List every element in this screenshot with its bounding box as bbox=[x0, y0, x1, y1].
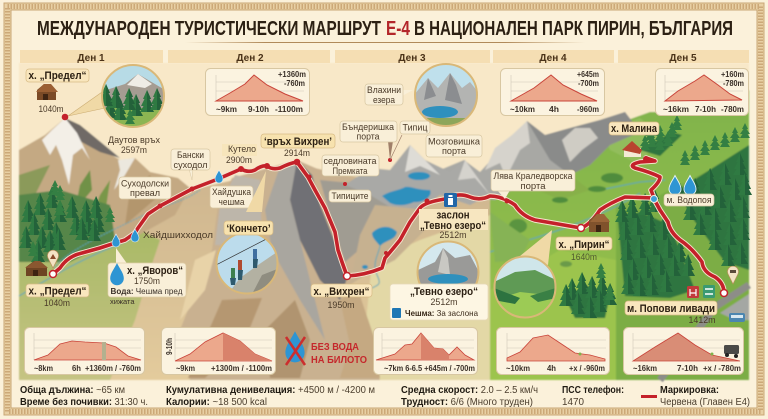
elevation card: day 1: ~8km bbox=[34, 364, 53, 373]
label: х. Пирин bbox=[556, 237, 612, 262]
label: седловината Премката bbox=[322, 155, 379, 176]
elevation card: day 5 bbox=[624, 328, 744, 374]
label: седловината Премката: Премката bbox=[332, 166, 368, 176]
column headers: Ден 2 bbox=[236, 53, 264, 64]
icons: water drops bbox=[112, 170, 696, 247]
label: седловината Премката: седловината bbox=[324, 156, 376, 166]
stats: rescue phone: 1470 bbox=[562, 397, 584, 408]
stats: length and time: Време без почивки: 31:30 ч. bbox=[20, 396, 148, 408]
title bbox=[37, 18, 733, 43]
red route bbox=[53, 158, 724, 293]
label: Даутов връх: Даутов връх bbox=[108, 135, 160, 145]
icon: hut Predel bbox=[25, 261, 48, 276]
label: заслон Тевно езеро bbox=[419, 209, 488, 240]
label: Предел top: х. „Предел“ bbox=[28, 70, 86, 82]
profile card: day 2: ~9km bbox=[216, 105, 237, 114]
label: х. Пирин: х. „Пирин“ bbox=[558, 239, 610, 251]
inset: Кончето via ferrata: ‘Кончето’ bbox=[226, 223, 270, 235]
icon: info sign bbox=[444, 193, 457, 207]
callout: Тевно езеро bbox=[390, 284, 488, 320]
legend: trail marking bbox=[641, 385, 750, 408]
elevation card: day 5: 7-10h bbox=[677, 364, 698, 373]
label: Кутело: 2900m bbox=[226, 155, 252, 165]
elevation card: day 5: ~16km bbox=[633, 364, 657, 373]
label: Мозговишка порта: порта bbox=[442, 146, 466, 156]
elevation card: day 2: 9-10h bbox=[165, 338, 174, 355]
column headers: Ден 1 bbox=[77, 53, 105, 64]
inset: forest peak bbox=[68, 62, 166, 132]
profile card: day 5: -780m bbox=[721, 105, 744, 114]
label: х. Малина: х. Малина bbox=[611, 123, 658, 135]
label: Бански суходол: Бански bbox=[177, 150, 204, 160]
column headers: Ден 4 bbox=[539, 53, 567, 64]
icon: hut Пирин bbox=[589, 214, 610, 232]
label: Хайдушка чешма: чешма bbox=[218, 197, 244, 207]
stats: speed and difficulty bbox=[401, 385, 538, 408]
stats: speed and difficulty: Трудност: 6/6 (Много труден) bbox=[401, 397, 533, 408]
map background bbox=[19, 63, 749, 380]
profile card: day 4: ~10km bbox=[510, 105, 535, 114]
label: х. Пирин: 1640m bbox=[571, 252, 597, 262]
profile card: day 5: +160m bbox=[721, 70, 744, 79]
terrain: lower left meadow bbox=[19, 215, 160, 380]
title: МЕЖДУНАРОДЕН ТУРИСТИЧЕСКИ МАРШРУТ bbox=[37, 18, 381, 40]
road bbox=[660, 285, 749, 380]
icons: parking and bed bbox=[687, 285, 715, 298]
profile card: day 4: -700m bbox=[578, 79, 599, 88]
terrain: green hill bbox=[490, 90, 749, 380]
profile card: day 2: 9-10h bbox=[248, 105, 269, 114]
label: Даутов връх bbox=[108, 135, 160, 155]
callout: Тевно езеро: 2512m bbox=[430, 297, 458, 307]
elevation card: day 1: 6h bbox=[72, 364, 81, 373]
label: Суходолски превал: Суходолски bbox=[121, 178, 169, 188]
stats: elevation and calories bbox=[166, 385, 375, 408]
stats: rescue phone: ПСС телефон: bbox=[562, 384, 624, 396]
icon: house Малина bbox=[622, 141, 642, 157]
elevation card: day 2: +1300m / -1100m bbox=[211, 364, 272, 373]
small bushes bbox=[509, 173, 623, 267]
profile card: day 4 bbox=[500, 68, 604, 116]
profile card: day 2: -1100m bbox=[275, 105, 303, 114]
label: Лява Краледворска порта bbox=[491, 170, 575, 199]
column headers bbox=[20, 50, 749, 64]
label: Хайдушка чешма bbox=[210, 186, 253, 208]
elevation card: day 4: ~10km bbox=[506, 364, 530, 373]
forest: day 5 upper right bbox=[640, 115, 752, 266]
elevation card: day 4: +x / -960m bbox=[569, 364, 605, 373]
elevation card: day 2: ~9km bbox=[176, 364, 195, 373]
label: х. Вихрен: х. „Вихрен“ bbox=[314, 286, 370, 298]
central Vihren massif bbox=[180, 160, 395, 380]
range behind lakes bbox=[345, 145, 490, 210]
label: х. Вихрен bbox=[311, 284, 372, 310]
elevation card: day 4 bbox=[496, 328, 610, 374]
callout: Яворов: 1750m bbox=[134, 276, 160, 286]
forest floor: left bbox=[19, 190, 115, 262]
label: м. Водопоя: м. Водопоя bbox=[666, 195, 712, 205]
label: заслон Тевно езеро: заслон bbox=[436, 210, 470, 222]
grey range bbox=[400, 112, 640, 200]
label: Предел bottom: х. „Предел“ bbox=[28, 286, 86, 298]
label: Лява Краледворска порта: порта bbox=[520, 181, 546, 191]
lakes bbox=[362, 172, 431, 269]
no water warning: БЕЗ ВОДА bbox=[311, 341, 359, 353]
stats: elevation and calories: Калории: ~18 500 kcal bbox=[166, 397, 267, 408]
label: Влахини езера bbox=[365, 84, 413, 105]
callout: Яворов: Вода: Чешма пред bbox=[110, 287, 183, 296]
elevation card: day 2 bbox=[162, 328, 276, 374]
inset: lake peaks bbox=[414, 62, 478, 128]
label: Типиц: Типиц bbox=[402, 122, 428, 132]
stats: elevation and calories: Кумулативна денивелация: +4500 м / -4200 м bbox=[166, 385, 375, 396]
label: Хайдушка чешма: Хайдушка bbox=[212, 187, 251, 197]
label: Вихрен summit bbox=[261, 134, 335, 158]
label: Вихрен summit: ‘връх Вихрен’ bbox=[264, 136, 332, 148]
profile card: day 5: 7-10h bbox=[695, 105, 716, 114]
icon: map pin bbox=[48, 250, 58, 268]
column headers: Ден 5 bbox=[669, 53, 697, 64]
profile card: day 5: ~16km bbox=[663, 105, 689, 114]
profile card: day 5 bbox=[656, 68, 748, 116]
terrain: lower cream-green valley bbox=[360, 215, 490, 380]
label: х. Вихрен: 1950m bbox=[328, 300, 354, 310]
elevation card: day 3 bbox=[374, 328, 478, 374]
profile card: day 4: 4h bbox=[549, 105, 559, 114]
forest: day 4 bbox=[559, 263, 617, 318]
no water warning: НА БИЛОТО bbox=[311, 354, 367, 366]
streams bbox=[19, 180, 665, 296]
elevation card: day 3: ~7km 6-6.5 +645m / -700m bbox=[384, 364, 475, 373]
label: Типиц bbox=[390, 121, 430, 160]
icon: hut top bbox=[36, 84, 58, 100]
label: Бъндеришка порта bbox=[340, 121, 397, 160]
callout: Яворов bbox=[108, 248, 186, 306]
label: Лява Краледворска порта: Лява Краледворска bbox=[494, 171, 572, 181]
stats: rescue phone bbox=[562, 384, 624, 408]
label: м. Попови ливади: 1412m bbox=[688, 315, 716, 325]
inset: green valley bbox=[494, 230, 556, 320]
label: Типиците: Типиците bbox=[332, 191, 368, 201]
left mountain bbox=[19, 118, 190, 240]
altitude 1040m top: 1040m bbox=[38, 104, 64, 114]
label: Бански суходол: суходол bbox=[174, 160, 208, 170]
callout: Яворов: х. „Яворов“ bbox=[127, 265, 183, 277]
label: Бански суходол bbox=[171, 149, 210, 180]
callout: Тевно езеро: „Тевно езеро“ bbox=[410, 286, 478, 298]
label: Бъндеришка порта: Бъндеришка bbox=[342, 122, 394, 132]
label: заслон Тевно езеро: 2512m bbox=[440, 230, 466, 240]
legend: trail marking: Червена (Главен Е4) bbox=[660, 397, 750, 408]
label: Хайдушки ход: Хайдшихходол bbox=[143, 230, 213, 240]
elevation card: day 4: 4h bbox=[547, 364, 556, 373]
label: Суходолски превал bbox=[119, 177, 171, 199]
stats: length and time: Обща дължина: ~65 км bbox=[20, 384, 125, 396]
profile card: day 2: -760m bbox=[284, 79, 305, 88]
label: Бъндеришка порта: порта bbox=[356, 132, 380, 142]
label: Влахини езера: Влахини bbox=[367, 85, 401, 95]
icon: car pin bbox=[728, 266, 739, 284]
label: Кутело bbox=[222, 144, 257, 165]
label: Кутело: Кутело bbox=[228, 144, 256, 154]
label: Суходолски превал: превал bbox=[130, 188, 160, 198]
elevation card: day 5: +x / -780m bbox=[703, 364, 741, 373]
callout: Яворов: хижата bbox=[110, 297, 135, 306]
label: Даутов връх: 2597m bbox=[121, 145, 147, 155]
label: м. Попови ливади bbox=[625, 301, 717, 325]
inset: Кончето via ferrata bbox=[216, 171, 280, 298]
label: Мозговишка порта bbox=[426, 135, 482, 157]
no water warning bbox=[285, 331, 367, 366]
legend: trail marking: Маркировка: bbox=[660, 385, 719, 396]
terrain: tan foothills bbox=[19, 165, 490, 380]
column headers: Ден 3 bbox=[398, 53, 426, 64]
inset: Тевно езеро bbox=[416, 240, 480, 284]
stats: speed and difficulty: Средна скорост: 2.0 – 2.5 км/ч bbox=[401, 385, 538, 396]
label: Предел bottom: 1040m bbox=[44, 298, 70, 308]
elevation card: day 1 bbox=[24, 328, 144, 374]
profile card: day 5: -780m bbox=[723, 79, 744, 88]
label: м. Попови ливади: м. Попови ливади bbox=[627, 303, 715, 315]
title: E-4 bbox=[386, 18, 411, 40]
profile card: day 4: +645m bbox=[577, 70, 599, 79]
elevation card: day 1: +1360m / -760m bbox=[85, 364, 141, 373]
label: Мозговишка порта: Мозговишка bbox=[428, 136, 480, 146]
route waypoints bbox=[50, 114, 728, 296]
callout: Тевно езеро: Чешма: За заслона bbox=[405, 308, 478, 318]
label: Предел bottom bbox=[26, 284, 89, 308]
profile card: day 4: -960m bbox=[577, 105, 599, 114]
forest: day 5 low bbox=[615, 190, 695, 296]
label: заслон Тевно езеро: „Тевно езеро“ bbox=[420, 220, 486, 232]
stats: length and time bbox=[20, 384, 148, 408]
profile card: day 2: +1360m bbox=[278, 70, 306, 79]
forest: left slope bbox=[19, 180, 115, 262]
icon: van bbox=[729, 313, 745, 322]
profile card: day 2 bbox=[206, 68, 310, 116]
label: Влахини езера: езера bbox=[373, 95, 395, 105]
forest floor: day 5 bbox=[618, 145, 749, 298]
label: Вихрен summit: 2914m bbox=[284, 148, 310, 158]
